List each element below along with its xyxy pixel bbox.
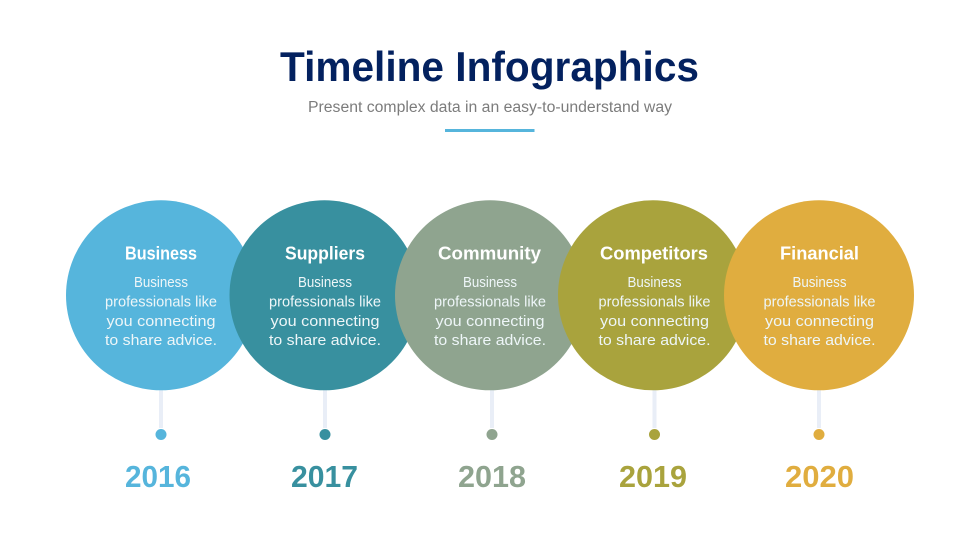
text block: Business description: Business bbox=[134, 274, 188, 291]
year: 2020: 2020 bbox=[785, 459, 854, 494]
text block: Suppliers description: professionals like bbox=[269, 294, 381, 310]
text block: Suppliers description bbox=[269, 274, 381, 349]
heading: Community: Community bbox=[438, 242, 542, 264]
heading: Competitors: Competitors bbox=[600, 242, 708, 264]
year: 2016: 2016 bbox=[125, 459, 191, 494]
heading: Financial: Financial bbox=[780, 242, 859, 264]
text block: Suppliers description: you connecting bbox=[270, 313, 380, 330]
stem and dot: 2019 bbox=[649, 390, 660, 440]
stem and dot: 2018 bbox=[486, 390, 498, 440]
text block: Competitors description: to share advice. bbox=[598, 332, 710, 349]
text block: Community description: to share advice. bbox=[434, 332, 546, 349]
text block: Community description: you connecting bbox=[436, 313, 544, 330]
year: 2019: 2019 bbox=[619, 459, 687, 494]
heading: Suppliers: Suppliers bbox=[285, 242, 365, 264]
text block: Business description bbox=[105, 274, 217, 349]
stem and dot: 2017 bbox=[320, 390, 330, 440]
panel: Suppliers circle bbox=[230, 200, 420, 390]
year: 2018: 2018 bbox=[458, 459, 526, 494]
text block: Financial description: to share advice. bbox=[764, 332, 876, 349]
text block: Competitors description: Business bbox=[628, 274, 682, 291]
text block: Business description: professionals like bbox=[105, 294, 217, 310]
text block: Financial description: Business bbox=[792, 274, 846, 291]
text block: Competitors description: professionals like bbox=[598, 294, 710, 310]
stem and dot: 2020 bbox=[814, 390, 824, 440]
text block: Business description: you connecting bbox=[106, 313, 216, 330]
text block: Suppliers description: Business bbox=[298, 274, 352, 291]
panel: Financial circle bbox=[724, 200, 914, 390]
text block: Financial description: professionals like bbox=[764, 294, 876, 310]
stem and dot: 2016 bbox=[156, 390, 166, 440]
text block: Community description bbox=[434, 274, 546, 349]
panel: Business circle bbox=[66, 200, 256, 390]
text block: Suppliers description: to share advice. bbox=[269, 332, 381, 349]
text block: Competitors description: you connecting bbox=[600, 313, 709, 330]
text block: Competitors description bbox=[598, 274, 710, 349]
year: 2017: 2017 bbox=[291, 459, 358, 494]
panel: Community circle bbox=[395, 200, 585, 390]
text block: Community description: Business bbox=[463, 274, 517, 291]
text block: Financial description: you connecting bbox=[765, 313, 874, 330]
panel: Competitors circle bbox=[558, 200, 748, 390]
title accent rule bbox=[445, 129, 534, 132]
text block: Financial description bbox=[764, 274, 876, 349]
title: Timeline Infographics bbox=[280, 43, 699, 90]
subtitle: Present complex data in an easy-to-understand way bbox=[308, 99, 672, 116]
heading: Business: Business bbox=[125, 242, 197, 264]
text block: Community description: professionals like bbox=[434, 294, 546, 310]
text block: Business description: to share advice. bbox=[105, 332, 217, 349]
